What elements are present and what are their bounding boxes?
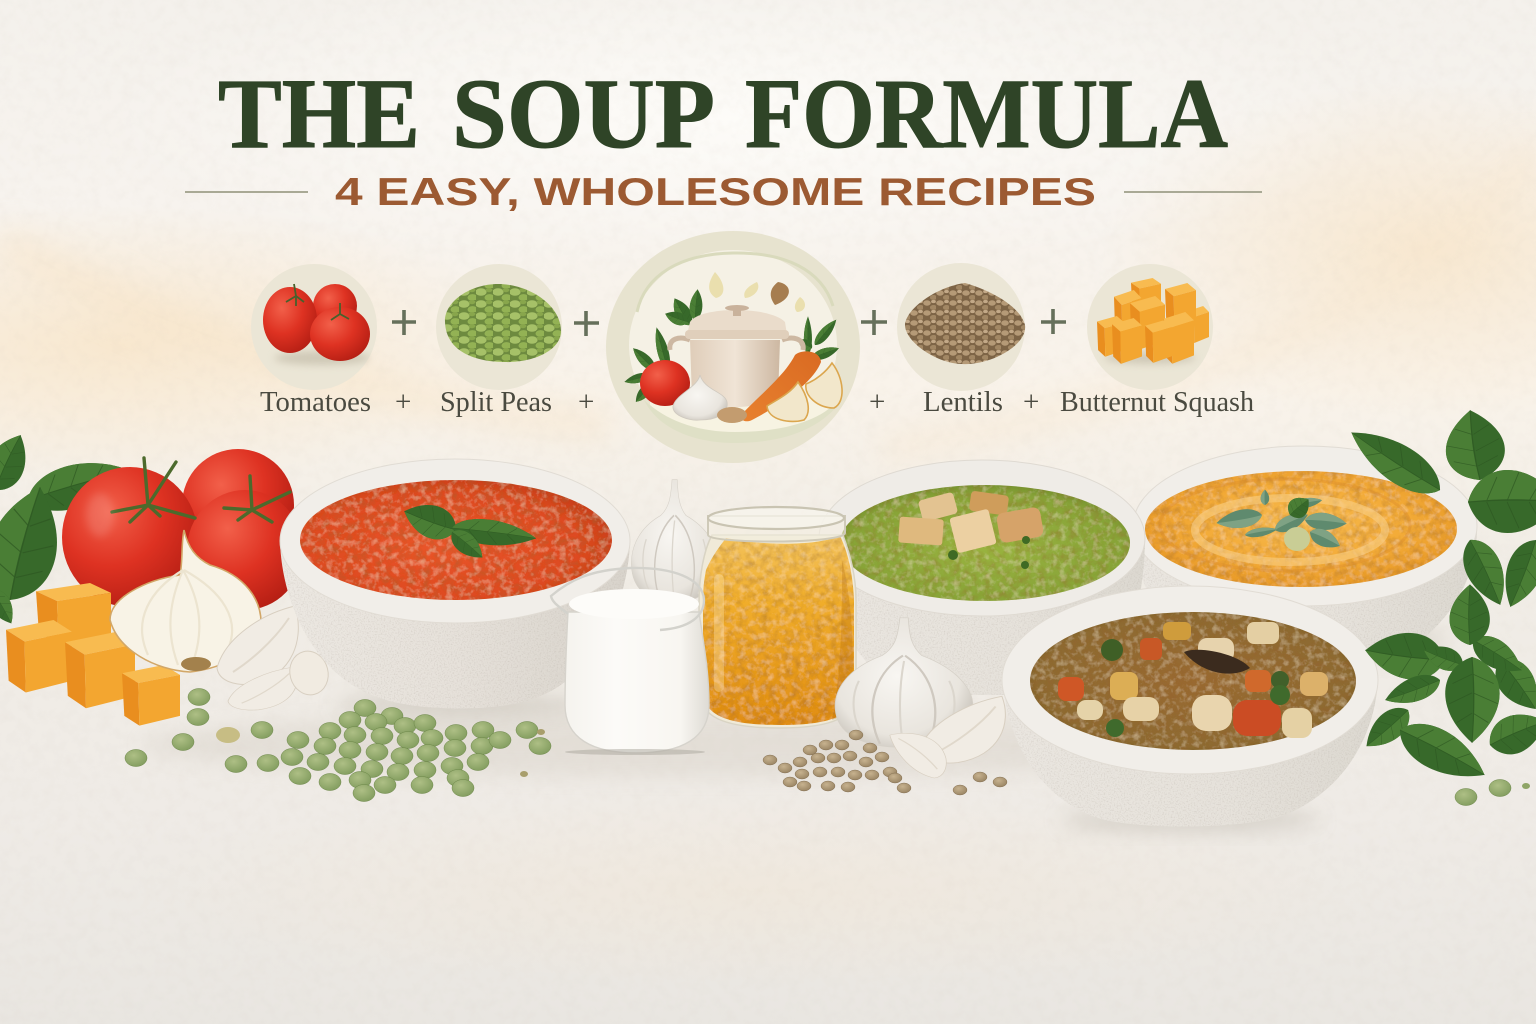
ingredient labels: + bbox=[395, 386, 411, 418]
formula row bbox=[251, 231, 1213, 463]
pot leaves right bbox=[796, 316, 841, 363]
garlic cloves center bbox=[890, 696, 1005, 778]
garlic bulb behind jars bbox=[631, 480, 718, 602]
ingredient labels: Tomatoes bbox=[260, 386, 371, 418]
garlic cloves left bbox=[217, 606, 333, 710]
ingredient labels: Split Peas bbox=[440, 386, 552, 418]
split pea pile bbox=[125, 688, 551, 802]
icon: split peas bbox=[436, 264, 562, 390]
scattered peas right bbox=[1455, 780, 1530, 806]
subtitle with divider rules: 4 EASY, WHOLESOME RECIPES bbox=[335, 171, 1096, 214]
bowl: green split pea soup bbox=[819, 460, 1145, 695]
table shadow bbox=[140, 713, 1260, 777]
title bbox=[218, 58, 1228, 169]
stew vegetables bbox=[1058, 622, 1328, 738]
garlic bulb center bbox=[835, 618, 973, 747]
broth jar bbox=[699, 507, 856, 728]
bowl: tomato soup bbox=[280, 459, 630, 715]
milk jug bbox=[551, 568, 709, 755]
ingredient labels: + bbox=[578, 386, 594, 418]
ingredient labels: + bbox=[1023, 386, 1039, 418]
ingredient labels bbox=[260, 386, 1254, 418]
title: THE bbox=[218, 58, 420, 169]
ingredient labels: Butternut Squash bbox=[1060, 386, 1254, 418]
bowl: lentil vegetable stew bbox=[1002, 586, 1378, 830]
basil leaves left bbox=[0, 427, 136, 628]
ingredient labels: + bbox=[869, 386, 885, 418]
pot leaves left bbox=[623, 289, 704, 405]
plus bbox=[574, 311, 599, 336]
herb garnish bbox=[1215, 490, 1347, 553]
title: SOUP bbox=[452, 58, 715, 169]
tomatoes left bbox=[62, 449, 303, 610]
butternut squash cubes left bbox=[6, 583, 180, 726]
icon: butternut squash cubes bbox=[1087, 264, 1213, 390]
plus bbox=[861, 310, 887, 335]
lentil pile bbox=[763, 730, 1007, 795]
spinach leaves right upper bbox=[1341, 406, 1536, 613]
plus bbox=[1041, 309, 1066, 334]
icon: lentils bbox=[897, 263, 1025, 391]
ingredient labels: Lentils bbox=[923, 386, 1003, 418]
bowl: orange squash soup bbox=[1133, 446, 1477, 658]
plus bbox=[392, 310, 416, 335]
icon: tomatoes bbox=[251, 264, 377, 390]
spinach leaves right lower bbox=[1358, 584, 1536, 792]
croutons bbox=[898, 491, 1044, 569]
title: FORMULA bbox=[745, 58, 1228, 169]
onion bbox=[110, 530, 261, 672]
basil garnish bbox=[399, 496, 538, 565]
icon: central soup pot medallion bbox=[606, 231, 860, 463]
